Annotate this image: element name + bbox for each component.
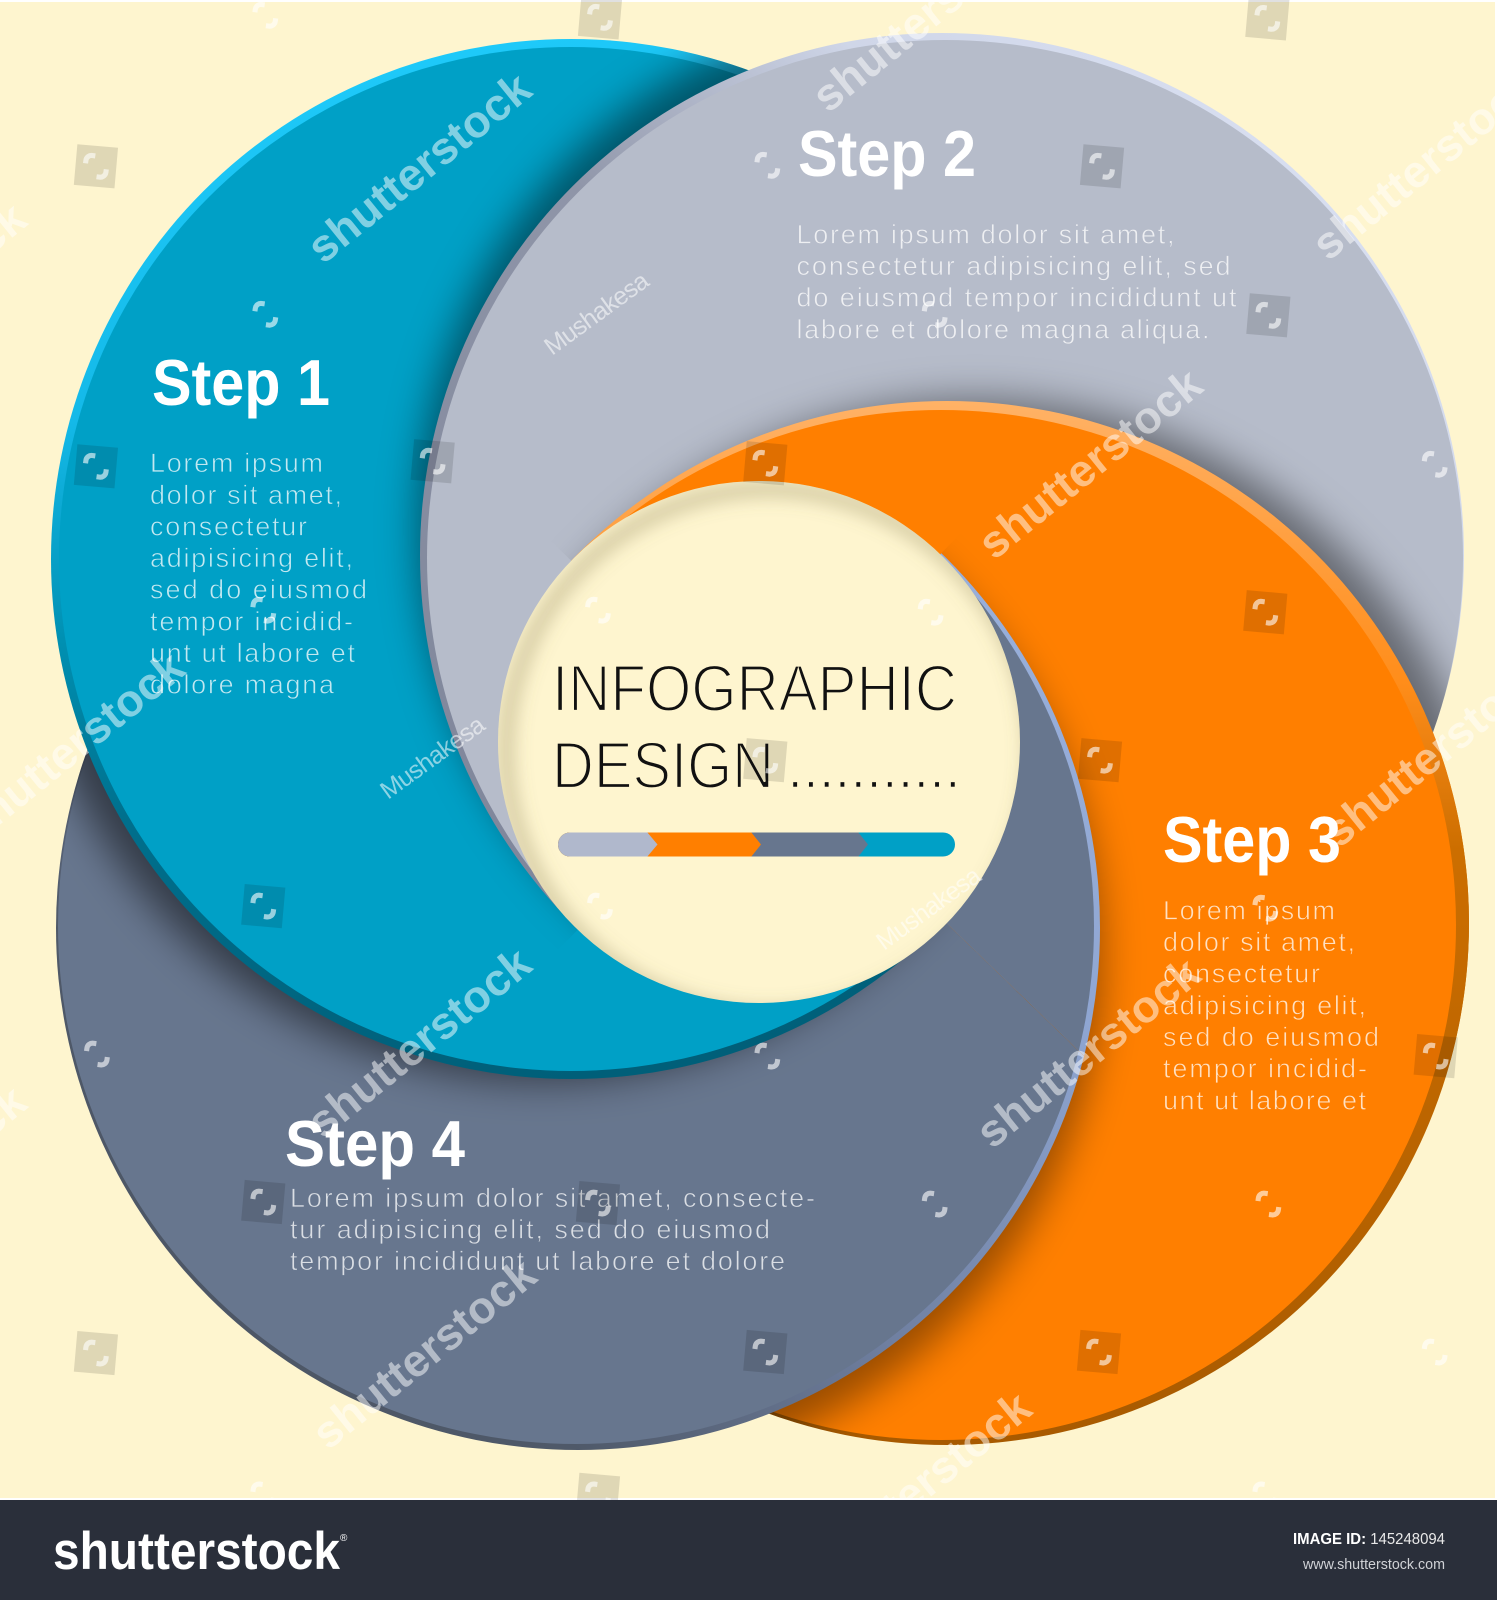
step 4 heading: Step 4 xyxy=(285,1107,465,1180)
center title: INFOGRAPHIC xyxy=(552,651,957,725)
step 3 text: consectetur xyxy=(1163,959,1320,989)
shadow of step 3 disc on step 2 disc xyxy=(568,374,1454,732)
step 4 text: tempor incididunt ut labore et dolore xyxy=(290,1246,785,1276)
shadow of step 1 disc on step 4 disc xyxy=(68,750,936,1103)
shadow of step 4 disc on step 3 disc top layer xyxy=(942,548,1128,1060)
step 2 text: consectetur adipisicing elit, sed xyxy=(796,251,1230,281)
step 2 heading: Step 2 xyxy=(798,117,976,190)
panel: center circle xyxy=(498,481,1032,1015)
step 1 heading: Step 1 xyxy=(152,346,330,419)
watermark wordmarks: shutterstock xyxy=(297,61,541,273)
step 3 text: unt ut labore et xyxy=(1163,1085,1366,1115)
shadow of step 4 disc on step 3 disc xyxy=(769,1056,1118,1434)
step 3 text: adipisicing elit, xyxy=(1163,990,1366,1020)
image id: IMAGE ID: 145248094 xyxy=(1293,1531,1445,1548)
step 4 text: tur adipisicing elit, sed do eiusmod xyxy=(290,1215,770,1245)
progress bar xyxy=(551,832,955,857)
watermark wordmarks: Mushakesa xyxy=(871,861,986,956)
step 1 text: dolor sit amet, xyxy=(150,480,342,510)
watermark wordmarks: Mushakesa xyxy=(539,266,654,361)
panel: step 2 disc xyxy=(420,33,1464,912)
watermark wordmarks: shutterstock xyxy=(797,1380,1041,1592)
step 1 text xyxy=(150,448,367,700)
step 2 text xyxy=(796,219,1237,344)
step 3 text: dolor sit amet, xyxy=(1163,927,1355,957)
watermark wordmarks: shutterstock xyxy=(302,1247,546,1459)
step 1 text: dolore magna xyxy=(150,670,335,700)
panel: step 3 disc top layer xyxy=(571,401,1469,1060)
step 4 text: Lorem ipsum dolor sit amet, consecte- xyxy=(290,1183,815,1213)
watermark wordmarks: Mushakesa xyxy=(375,710,490,805)
step 1 text: consectetur xyxy=(150,512,307,542)
step 1 text: unt ut labore et xyxy=(150,638,355,668)
center title: ........... xyxy=(786,728,962,802)
watermark wordmarks: shutterstock xyxy=(968,357,1212,569)
step 3 text: sed do eiusmod xyxy=(1163,1022,1379,1052)
step 3 text: tempor incidid- xyxy=(1163,1054,1367,1084)
step 4 text xyxy=(290,1183,815,1276)
site url: www.shutterstock.com xyxy=(1302,1556,1445,1573)
panel: step 4 disc top layer xyxy=(940,553,1100,1056)
step 2 text: Lorem ipsum dolor sit amet, xyxy=(796,219,1174,249)
step 1 text: tempor incidid- xyxy=(150,606,353,636)
panel: step 4 disc xyxy=(56,406,1100,1450)
watermark wordmarks: shutterstock xyxy=(966,946,1210,1158)
step 3 text: Lorem ipsum xyxy=(1163,895,1335,925)
center title xyxy=(552,651,962,802)
step 1 text: adipisicing elit, xyxy=(150,543,353,573)
shadow of step 2 disc on step 1 disc xyxy=(392,48,748,934)
panel: step 1 disc xyxy=(51,39,902,1079)
step 3 text xyxy=(1163,895,1379,1115)
step 1 text: Lorem ipsum xyxy=(150,448,323,478)
center title: DESIGN xyxy=(552,728,774,802)
footer bar xyxy=(0,1500,1497,1600)
footer logo: shutterstock xyxy=(53,1522,340,1581)
panel: step 3 disc base layer xyxy=(425,401,1469,1445)
registered mark: ® xyxy=(340,1533,348,1544)
watermark wordmarks: shutterstock xyxy=(297,936,541,1148)
step 1 text: sed do eiusmod xyxy=(150,575,367,605)
step 3 heading: Step 3 xyxy=(1163,803,1341,876)
step 2 text: do eiusmod tempor incididunt ut xyxy=(796,283,1237,313)
step 2 text: labore et dolore magna aliqua. xyxy=(796,314,1210,344)
